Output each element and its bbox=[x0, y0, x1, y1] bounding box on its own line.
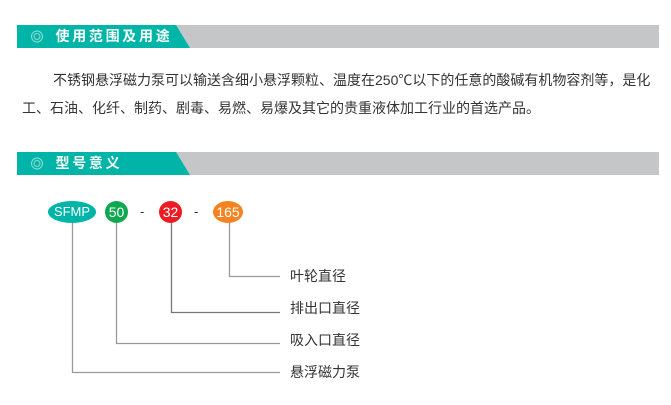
model code badge: 32 bbox=[159, 201, 182, 223]
separator dash: - bbox=[140, 204, 144, 219]
section header: model meaning: 型号意义 bbox=[56, 155, 122, 171]
model code badge: 165 bbox=[213, 201, 243, 223]
label: outlet diameter: 排出口直径 bbox=[290, 300, 360, 316]
section header: usage scope: 使用范围及用途 bbox=[56, 28, 172, 44]
model code badge: SFMP: SFMP bbox=[54, 204, 90, 219]
usage description text: 不锈钢悬浮磁力泵可以输送含细小悬浮颗粒、温度在250℃以下的任意的酸碱有机物容剂等，是化 bbox=[53, 72, 650, 88]
model code badge: 32: 32 bbox=[163, 204, 178, 220]
model code badge: SFMP bbox=[48, 201, 96, 223]
label: inlet diameter: 吸入口直径 bbox=[290, 332, 360, 348]
model code badge: 165: 165 bbox=[216, 204, 240, 220]
label: impeller diameter: 叶轮直径 bbox=[290, 268, 346, 284]
model code badge: 50 bbox=[105, 201, 128, 223]
separator dash: - bbox=[194, 204, 198, 219]
section header: usage scope bbox=[17, 25, 659, 48]
section header: model meaning bbox=[17, 152, 659, 175]
usage description text bbox=[22, 72, 650, 116]
label: magnetic suspension pump: 悬浮磁力泵 bbox=[290, 364, 360, 380]
usage description text: 工、石油、化纤、制药、剧毒、易燃、易爆及其它的贵重液体加工行业的首选产品。 bbox=[22, 100, 540, 116]
model code badge: 50: 50 bbox=[109, 204, 124, 220]
